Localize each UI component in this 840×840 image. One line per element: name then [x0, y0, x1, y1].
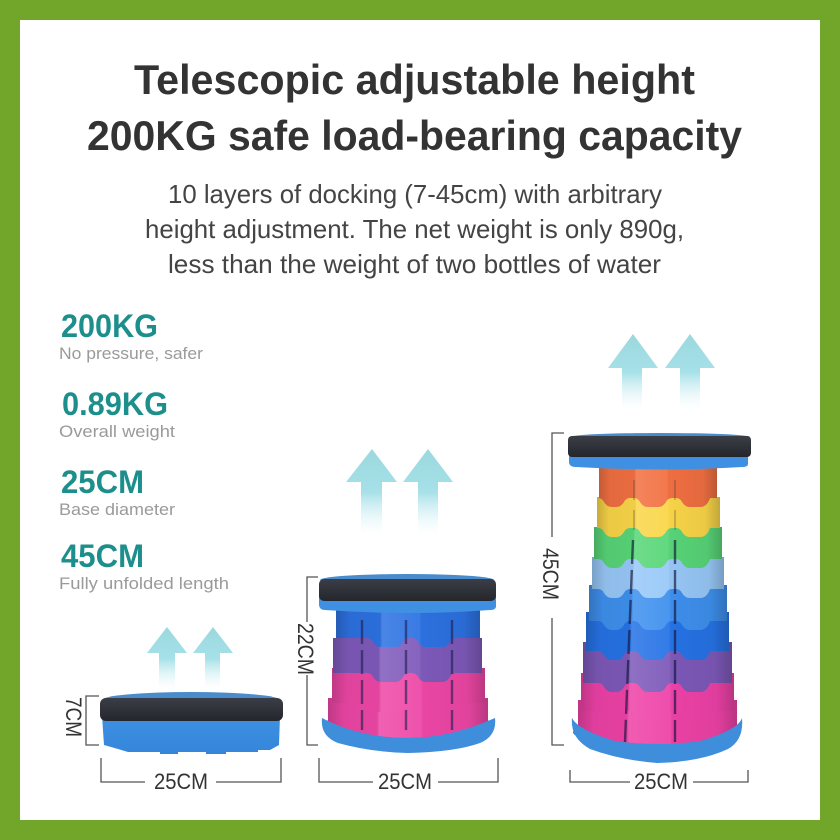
spec: load capacity: No pressure, safer — [59, 344, 203, 363]
spec: weight — [59, 386, 175, 441]
label: 45CM: 45CM — [538, 548, 563, 600]
small stool, 7cm — [100, 692, 283, 754]
medium stool dimensions — [307, 577, 498, 782]
base plate back — [573, 718, 741, 746]
base rim — [322, 718, 495, 753]
spec: unfolded length: 45CM — [61, 538, 144, 574]
seat top — [320, 574, 494, 586]
seat foam — [100, 698, 283, 721]
title: Telescopic adjustable height — [134, 56, 695, 103]
description text: 10 layers of docking (7-45cm) with arbitrary — [168, 179, 662, 209]
title: 200KG safe load-bearing capacity — [87, 112, 743, 159]
spec: unfolded length — [59, 538, 229, 593]
seat underside — [569, 453, 748, 470]
seat foam — [568, 436, 751, 457]
label: 22CM: 22CM — [293, 623, 318, 675]
spec: base diameter: 25CM — [61, 464, 144, 500]
spec: unfolded length: Fully unfolded length — [59, 574, 229, 593]
tall stool dimensions — [552, 433, 748, 782]
label: 7CM: 7CM — [61, 697, 86, 737]
arrows: small stool — [147, 627, 233, 690]
spec: weight: 0.89KG — [62, 386, 168, 422]
description text: less than the weight of two bottles of water — [168, 249, 661, 279]
rainbow layer stack — [578, 465, 737, 748]
seat top — [570, 433, 750, 441]
spec: load capacity: 200KG — [61, 308, 158, 344]
label: medium width: 25CM — [378, 769, 432, 794]
layer stack — [328, 608, 488, 738]
spec: weight: Overall weight — [59, 422, 175, 441]
medium stool, 22cm — [319, 574, 496, 753]
arrows: medium stool — [346, 449, 453, 535]
seat foam — [319, 579, 496, 601]
base plate back — [323, 711, 493, 739]
small stool dimensions — [86, 696, 281, 782]
description text: height adjustment. The net weight is only 890g, — [145, 214, 684, 244]
seat underside — [319, 596, 496, 613]
title — [87, 56, 743, 159]
spec: base diameter: Base diameter — [59, 500, 175, 519]
description text — [145, 179, 684, 279]
stool base — [102, 716, 280, 754]
tall stool, 45cm — [568, 433, 751, 763]
label: small width: 25CM — [154, 769, 208, 794]
seat top — [102, 692, 280, 708]
label: tall width: 25CM — [634, 769, 688, 794]
spec: base diameter — [59, 464, 175, 519]
base rim — [572, 718, 742, 763]
spec: load capacity — [59, 308, 203, 363]
spec list — [59, 308, 229, 593]
arrows: tall stool — [608, 334, 715, 410]
